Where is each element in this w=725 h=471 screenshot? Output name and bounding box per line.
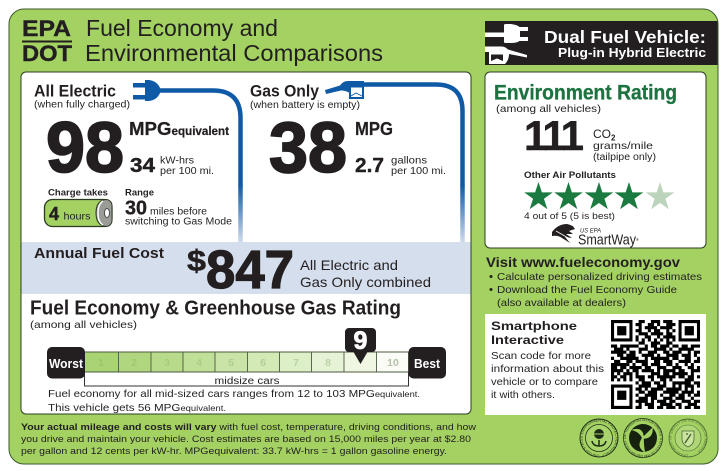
- scale cells: 6: [260, 357, 266, 369]
- rating marker: 9: [345, 327, 376, 364]
- best tag: Best: [414, 357, 441, 371]
- panel: environment rating: [485, 72, 706, 248]
- rating note: This vehicle gets 56 MPG equivalent.: [48, 402, 226, 414]
- CO2 value: [524, 112, 656, 163]
- 2.7 gallons per 100 mi: 2.7: [355, 155, 384, 177]
- range: Range: [125, 188, 154, 198]
- 2.7 gallons per 100 mi: [355, 154, 446, 177]
- worst tag: Worst: [49, 357, 84, 371]
- environment rating heading: (among all vehicles): [496, 103, 601, 115]
- midsize cars bracket: midsize cars: [214, 376, 280, 387]
- star rating: [524, 182, 674, 209]
- scale cells: 10: [387, 357, 399, 369]
- gas only heading: (when battery is empty): [250, 100, 360, 111]
- smartphone text: information about this: [491, 363, 604, 375]
- seal: EPA: UNITED STATES ENVIRONMENTAL PROTECTION AGENCY: [580, 420, 618, 456]
- gas only heading: [250, 82, 360, 111]
- scale cells: 3: [164, 357, 170, 369]
- best tag: [408, 347, 446, 378]
- footnote: per gallon and 12 cents per kW-hr. MPGequivalent: 33.7 kW-hrs = 1 gallon gasoline energy.: [21, 446, 447, 457]
- footnote: [21, 422, 476, 457]
- CO2 value: grams/mile: [593, 140, 653, 152]
- 98 MPGe value: 98: [46, 109, 124, 188]
- all electric heading: (when fully charged): [34, 100, 130, 110]
- 2.7 gallons per 100 mi: per 100 mi.: [391, 165, 446, 177]
- 38 MPG value: 38: [269, 109, 347, 188]
- rating heading: [30, 298, 401, 331]
- rating scale: [47, 327, 446, 387]
- range: miles before: [150, 206, 207, 218]
- rating note: [48, 388, 420, 414]
- other air pollutants: 4 out of 5 (5 is best): [524, 211, 615, 222]
- 34 kW-hrs per 100 mi: per 100 mi.: [160, 165, 214, 177]
- visit fueleconomy.gov block: Visit www.fueleconomy.gov: [486, 255, 681, 270]
- smartphone text: [491, 319, 604, 401]
- environment rating heading: [494, 82, 677, 115]
- main white panel: [21, 72, 471, 414]
- cost note: All Electric and: [300, 257, 398, 273]
- annual fuel cost label: Annual Fuel Cost: [34, 246, 164, 262]
- smartway logo: ®: [636, 237, 639, 242]
- agency mark: EPA: [22, 16, 71, 41]
- all electric heading: [34, 82, 130, 110]
- icon: plug and cord: [133, 80, 243, 242]
- icon: white plug: [485, 24, 528, 43]
- smartphone text: Smartphone: [491, 319, 577, 333]
- banner text: Plug-in Hybrid Electric: [558, 46, 706, 60]
- rating marker: 9: 9: [354, 327, 367, 355]
- agency mark: [22, 16, 73, 66]
- icon: battery: 4: [49, 204, 59, 224]
- bullet list: Download the Fuel Economy Guide: [497, 284, 677, 296]
- bullet list: [490, 271, 702, 309]
- 2.7 gallons per 100 mi: gallons: [391, 154, 427, 166]
- rating heading: Fuel Economy & Greenhouse Gas Rating: [30, 298, 401, 320]
- worst tag: [47, 347, 85, 378]
- smartway logo: [552, 224, 639, 248]
- smartphone text: vehicle or to compare: [491, 376, 598, 388]
- cost note: Gas Only combined: [300, 274, 431, 290]
- QR code: [611, 322, 700, 407]
- rating note: Fuel economy for all mid-sized cars ranges from 12 to 103 MPG equivalent.: [48, 388, 420, 400]
- banner text: Dual Fuel Vehicle:: [544, 27, 706, 47]
- dual fuel vehicle banner: [485, 21, 718, 65]
- 38 MPG value: [269, 109, 393, 188]
- scale cells: 2: [131, 357, 137, 369]
- icon: battery: hours: [64, 212, 90, 222]
- CO2 value: CO: [593, 127, 611, 141]
- heading: Environmental Comparisons: [85, 40, 383, 66]
- panel: fuel economy and greenhouse gas rating: [30, 298, 446, 414]
- all electric heading: All Electric: [34, 82, 116, 100]
- cost note: [300, 257, 431, 290]
- banner text: [544, 27, 706, 60]
- footnote: you drive and maintain your vehicle. Cost estimates are based on 15,000 miles per year at $2.80: [21, 434, 471, 445]
- icon: white nozzle: [485, 46, 527, 64]
- rating heading: (among all vehicles): [30, 319, 137, 331]
- panel: annual fuel cost: [22, 240, 470, 300]
- bullet list: Calculate personalized driving estimates: [497, 271, 702, 283]
- visit fueleconomy.gov block: [486, 255, 702, 309]
- gas only heading: Gas Only: [250, 82, 320, 100]
- 98 MPGe value: [46, 109, 229, 188]
- smartway logo: US EPA: [580, 228, 601, 234]
- environment rating heading: Environment Rating: [494, 82, 677, 104]
- smartphone text: Scan code for more: [491, 350, 591, 362]
- 38 MPG value: MPG: [355, 118, 393, 139]
- panel: smartphone interactive: [485, 314, 706, 415]
- smartphone text: Interactive: [491, 333, 564, 347]
- other air pollutants: Other Air Pollutants: [524, 170, 616, 180]
- panel: all electric: [34, 80, 243, 242]
- scale cells: 5: [228, 357, 234, 369]
- seal: DOE: DEPARTMENT OF ENERGY UNITED STATES OF AMERICA: [670, 420, 706, 456]
- icon: fuel nozzle and hose: [325, 81, 465, 242]
- other air pollutants: [524, 170, 674, 222]
- midsize cars bracket: [84, 372, 408, 387]
- scale cells: 1: [98, 357, 104, 369]
- smartway logo: SmartWay: [578, 232, 637, 248]
- scale cells: [85, 352, 409, 372]
- CO2 value: 111: [524, 112, 584, 159]
- cost value: 847: [206, 240, 294, 300]
- seal: DOT: DEPARTMENT OF TRANSPORTATION UNITED STATES OF AMERICA: [624, 418, 662, 458]
- heading: Fuel Economy and: [86, 15, 278, 41]
- footnote: Your actual mileage and costs will vary with fuel cost, temperature, driving conditions, and how: [21, 422, 476, 433]
- range: [125, 188, 232, 228]
- scale cells: 8: [325, 357, 331, 369]
- icon: battery: [44, 200, 112, 226]
- charge time: [44, 188, 112, 226]
- CO2 value: 2: [611, 134, 616, 142]
- 34 kW-hrs per 100 mi: [130, 154, 214, 177]
- charge time: Charge takes: [48, 188, 108, 198]
- range: 30: [125, 198, 147, 220]
- bullet list: (also available at dealers): [497, 297, 626, 309]
- CO2 value: (tailpipe only): [593, 152, 656, 163]
- 98 MPGe value: MPGequivalent: [129, 118, 229, 139]
- smartphone text: it with others.: [491, 389, 555, 401]
- heading: [85, 15, 383, 66]
- cost value: $: [187, 245, 206, 278]
- scale cells: 7: [293, 357, 299, 369]
- panel: gas only: [250, 81, 465, 242]
- scale cells: 4: [196, 357, 202, 369]
- range: switching to Gas Mode: [125, 216, 232, 228]
- 34 kW-hrs per 100 mi: 34: [130, 155, 156, 177]
- agency mark: DOT: [22, 41, 73, 66]
- title block: [22, 15, 383, 66]
- 34 kW-hrs per 100 mi: kW-hrs: [160, 154, 194, 166]
